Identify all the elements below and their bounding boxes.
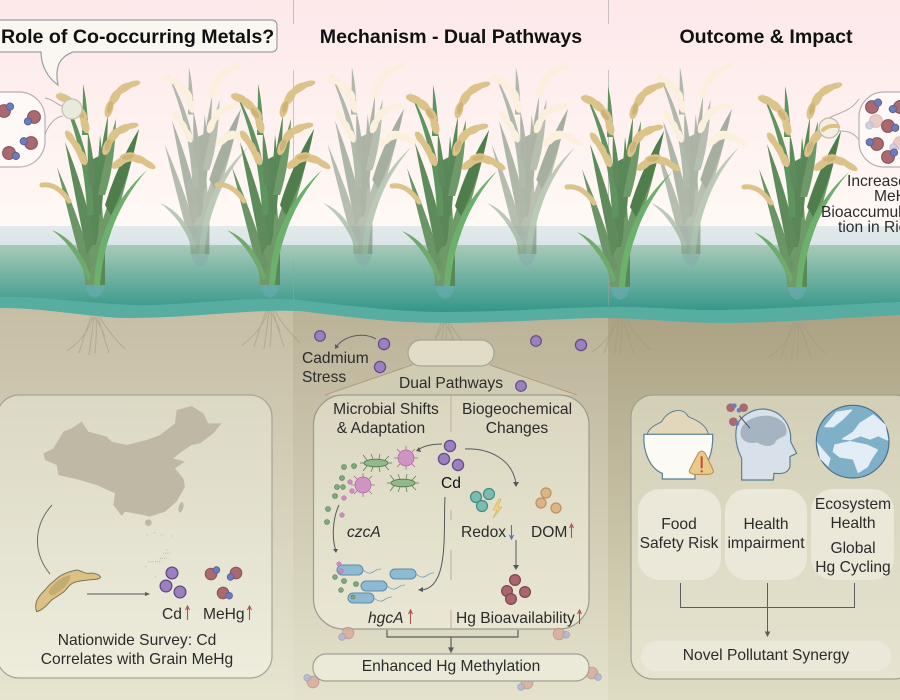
arrow heads	[333, 447, 519, 592]
icon: rice bowl with warning	[644, 410, 713, 479]
label: hgcA up: hgcA	[368, 610, 404, 627]
magnifier: right grain molecules	[819, 92, 900, 167]
label: DOM up: DOM	[531, 524, 567, 541]
box: food safety risk: Safety Risk	[640, 535, 719, 552]
column dividers	[294, 0, 608, 306]
pill: novel pollutant synergy: Novel Pollutant Synergy	[683, 647, 849, 664]
arrow to metals	[87, 592, 150, 596]
labels: headings in panel: & Adaptation	[337, 420, 425, 437]
background: water surface band	[0, 226, 900, 245]
atom near dual pathways	[516, 381, 526, 391]
labels: headings in panel	[333, 401, 572, 437]
background: paddy water	[0, 245, 900, 317]
label: MeHg up: MeHg	[203, 606, 245, 623]
box: health impairment: Health	[743, 516, 789, 533]
MeHg molecules	[205, 567, 242, 604]
background: sky	[0, 0, 900, 226]
icon: globe	[816, 405, 889, 478]
heading: mechanism: Mechanism - Dual Pathways	[320, 26, 582, 48]
labels: headings in panel: Changes	[486, 420, 548, 437]
pill: dual pathways top	[408, 340, 494, 366]
heading: left callout	[0, 20, 277, 85]
box: ecosystem health and global cycling: Ecosystem	[815, 496, 891, 513]
background: soil middle	[293, 295, 608, 700]
panel: nationwide survey	[0, 395, 272, 678]
bacteria	[333, 562, 434, 603]
trapezoid connector	[325, 365, 577, 395]
Cd atoms	[160, 567, 186, 598]
icon: rice grain	[36, 570, 101, 612]
box: ecosystem health and global cycling: Hg Cycling	[815, 559, 891, 576]
pill: enhanced Hg methylation	[313, 654, 589, 681]
caption: survey	[41, 632, 233, 668]
box: ecosystem health and global cycling	[811, 489, 894, 580]
box: food safety risk: Food	[661, 516, 697, 533]
background: soil left	[0, 295, 293, 700]
box: ecosystem health and global cycling: Global	[830, 540, 876, 557]
box: ecosystem health and global cycling: Health	[830, 515, 876, 532]
labels: headings in panel: Microbial Shifts	[333, 401, 439, 418]
label: cadmium stress with atoms: Stress	[302, 369, 346, 386]
icon: redox atoms	[470, 488, 502, 518]
icon: DOM atoms	[536, 488, 561, 513]
Cd cluster	[438, 440, 464, 492]
panel: outcome	[631, 395, 900, 679]
caption: survey: Correlates with Grain MeHg	[41, 651, 233, 668]
Cd cluster: Cd	[441, 475, 461, 492]
rice plants healthy	[42, 80, 858, 300]
map of China	[43, 406, 222, 577]
heading: outcome: Outcome & Impact	[679, 26, 853, 48]
icon: head with brain and molecules	[726, 403, 797, 480]
box: food safety risk	[638, 489, 721, 580]
wave band	[0, 297, 900, 323]
rice roots	[67, 311, 827, 361]
labels: headings in panel: Biogeochemical	[462, 401, 572, 418]
box: health impairment: impairment	[727, 535, 805, 552]
arc arrow from map to grain	[37, 505, 52, 574]
caption: survey: Nationwide Survey: Cd	[58, 632, 216, 649]
box: health impairment	[725, 489, 807, 580]
pill: enhanced Hg methylation: Enhanced Hg Methylation	[362, 658, 540, 675]
magnifier: left grain molecules	[0, 92, 82, 167]
label: redox down: Redox	[461, 524, 506, 541]
label: Hg bioavailability up: Hg Bioavailability	[456, 610, 575, 627]
label: cadmium stress with atoms	[302, 331, 587, 386]
rice plants faded	[160, 63, 748, 266]
Hg atoms	[502, 575, 530, 604]
label: dual pathways: Dual Pathways	[399, 375, 503, 392]
bracket connector to methylation	[387, 630, 518, 652]
label: cadmium stress with atoms: Cadmium	[302, 350, 369, 367]
label: czcA: czcA	[347, 524, 381, 541]
panel: mechanism	[314, 395, 589, 629]
label: Cd up: Cd	[162, 606, 182, 623]
arrows from Cd	[333, 444, 516, 590]
microbes	[324, 446, 419, 524]
pill: novel pollutant synergy	[641, 641, 891, 671]
text: increased MeHg bioaccumulation	[821, 173, 900, 236]
heading: left callout: Role of Co-occurring Metals?	[1, 26, 274, 48]
bracket connector to synergy	[680, 583, 854, 636]
background: soil right	[608, 295, 900, 700]
faded molecules around pill	[303, 625, 601, 690]
